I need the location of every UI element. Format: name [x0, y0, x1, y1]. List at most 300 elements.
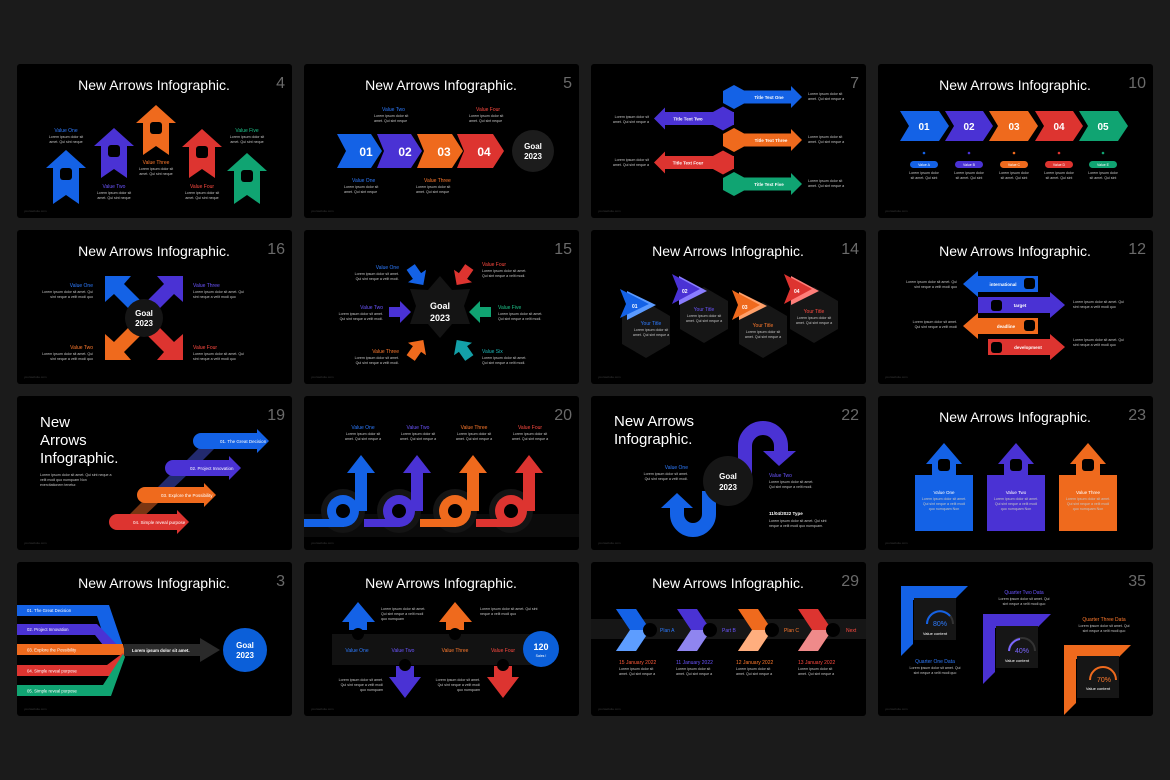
pills: 03. Explore the Possibility: [161, 493, 213, 498]
house orange: Qui sint neque a velit modi: [1067, 502, 1109, 506]
captions: amet. Qui sint neque a: [796, 321, 832, 325]
slide 35: quarter gauges: yourwebsite.com: [885, 707, 908, 711]
slide 22: S-curve arrows around goal: [591, 396, 866, 550]
labels: Value Three: [442, 648, 469, 654]
side texts: sint neque a velit modi quo: [1073, 343, 1116, 347]
arrow: orange: [136, 105, 176, 155]
slide number: 10: [1128, 75, 1146, 92]
labels: Value Four: [193, 345, 217, 351]
slide number: 14: [841, 241, 859, 258]
arrow 04: 04: [794, 289, 800, 295]
house purple: quo numquam Non: [1001, 507, 1031, 511]
title: New Arrows Infographic.: [652, 575, 804, 591]
arrow up orange: [439, 602, 472, 640]
band: [591, 619, 866, 639]
labels: Lorem ipsum dolor sit amet. Qui: [999, 597, 1050, 601]
dates: amet. Qui sint neque a: [619, 672, 655, 676]
labels: Lorem ipsum dolor sit amet.: [355, 356, 399, 360]
labels: Value One: [351, 425, 375, 431]
icons and labels: Plan A: [660, 628, 675, 634]
dates: 12 January 2022: [736, 660, 773, 666]
slide number: 23: [1128, 407, 1146, 424]
labels: sint neque a velit modi quo: [50, 295, 93, 299]
labels: Lorem ipsum dolor sit amet. Qui sint: [480, 607, 538, 611]
goal circle: Goal: [236, 641, 254, 650]
goal circle: 2023: [135, 319, 153, 328]
card orange: 70%: [1097, 677, 1111, 684]
icons and labels: Plan C: [784, 628, 799, 634]
slide number: 16: [267, 241, 285, 258]
pills: Value D: [1053, 163, 1066, 167]
slide 12: left/right alternating arrows: yourwebsite.com: [885, 375, 908, 379]
labels: Lorem ipsum dolor sit: [185, 191, 219, 195]
card purple: 40%: [1015, 648, 1029, 655]
slide number: 22: [841, 407, 859, 424]
card purple: Value content: [1005, 658, 1030, 663]
arrow 5 green right: [723, 172, 802, 196]
house orange: Value Three: [1076, 490, 1101, 495]
dates: Lorem ipsum dolor sit: [736, 667, 770, 671]
slide number: 3: [276, 573, 285, 590]
chevrons: [337, 134, 504, 168]
arrow 4 red left: [654, 150, 734, 174]
labels: quo numquam: [457, 688, 480, 692]
arrow 02: 02: [682, 289, 688, 295]
slide number: 35: [1128, 573, 1146, 590]
labels: Value Six: [482, 349, 503, 355]
captions: amet. Qui sint neque a: [633, 333, 669, 337]
labels: Value Two: [70, 345, 93, 351]
arrow down purple: [389, 659, 421, 698]
labels: [49, 128, 264, 200]
slide 3: converging bands to goal: [17, 562, 292, 716]
side texts: sint neque a velit modi quo: [1073, 305, 1116, 309]
side texts: Lorem ipsum dolor sit: [808, 179, 842, 183]
labels: Qui sint neque a velit modi.: [356, 277, 399, 281]
pills: Value A: [918, 163, 931, 167]
blue curved arrow: [661, 491, 709, 530]
pills: sit amet. Qui sint: [956, 176, 982, 180]
slide number: 4: [276, 75, 285, 92]
chevrons: 03: [437, 145, 451, 159]
pills: 02. Project Innovation: [190, 466, 234, 471]
pills: [109, 429, 269, 534]
labels: Lorem ipsum dolor sit: [457, 432, 491, 436]
goal circle: 2023: [719, 483, 737, 492]
labels: Lorem ipsum dolor sit amet.: [381, 607, 425, 611]
title block: Infographic.: [614, 431, 692, 448]
labels: neque a velit modi quo: [480, 612, 516, 616]
card blue: 80%: [933, 621, 947, 628]
labels: Lorem ipsum dolor sit: [469, 114, 503, 118]
labels: Value One: [54, 128, 78, 134]
labels: Value One: [70, 283, 93, 289]
arrow up blue: [342, 602, 375, 640]
arrow 3 orange right: [723, 128, 802, 152]
house purple: Qui sint neque a velit modi: [995, 502, 1037, 506]
side texts: amet. Qui sint neque a: [613, 163, 649, 167]
chevrons: 01: [918, 122, 930, 133]
pills: 01. The Great Decision: [220, 439, 267, 444]
labels: sint neque a velit modi quo: [1083, 629, 1125, 633]
slide number: 20: [554, 407, 572, 424]
slide 12: left/right alternating arrows: [878, 230, 1153, 384]
labels: Lorem ipsum dolor sit amet.: [482, 356, 526, 360]
slide 16: four diagonal arrows around goal: yourwebsite.com: [24, 375, 47, 379]
arrow target: [978, 292, 1065, 318]
labels: Lorem ipsum dolor sit amet. Qui sint: [769, 519, 827, 523]
side texts: amet. Qui sint neque a: [613, 120, 649, 124]
house orange: [1059, 443, 1117, 531]
side texts: amet. Qui sint neque a: [808, 184, 844, 188]
labels: Qui sint neque a velit modi: [341, 683, 383, 687]
dates: 13 January 2022: [798, 660, 835, 666]
arrow development: development: [1014, 345, 1042, 350]
captions: Your Title: [804, 309, 825, 315]
dark arrow: Lorem ipsum dolor sit amet.: [132, 648, 190, 653]
labels: quo numquam: [360, 688, 383, 692]
slide 4: five bookmark arrows: [17, 64, 292, 218]
title: New Arrows Infographic.: [939, 409, 1091, 425]
arrow 01: 01: [632, 304, 638, 310]
goal circle: [125, 299, 163, 337]
connectors: [123, 448, 215, 521]
labels: Qui sint neque a velit modi: [438, 683, 480, 687]
side texts: Lorem ipsum dolor sit amet. Qui: [1073, 300, 1124, 304]
labels: quo numquam: [381, 617, 404, 621]
house orange: quo numquam Non: [1073, 507, 1103, 511]
side texts: amet. Qui sint neque a: [808, 97, 844, 101]
slide 3: converging bands to goal: yourwebsite.com: [24, 707, 47, 711]
labels: Value Four: [491, 648, 515, 654]
labels: Value Two: [392, 648, 415, 654]
title block: New: [40, 414, 70, 431]
slide 23: three house arrows: yourwebsite.com: [885, 541, 908, 545]
side texts: Lorem ipsum dolor sit amet. Qui: [906, 280, 957, 284]
title block: Infographic.: [40, 450, 118, 467]
labels: Value Two: [769, 473, 792, 479]
pills: sit amet. Qui sint: [911, 176, 937, 180]
slide 10: five chevrons with pills: [878, 64, 1153, 218]
labels: Value Four: [482, 262, 506, 268]
labels: Qui sint neque a velit modi.: [769, 485, 812, 489]
house purple: [987, 443, 1045, 531]
labels: Value Four: [476, 107, 500, 113]
slide 7: hexagon arrows alternating: [591, 64, 866, 218]
title: New Arrows Infographic.: [78, 77, 230, 93]
labels: amet. Qui sint neque a: [456, 437, 492, 441]
slide 7: hexagon arrows alternating: yourwebsite.com: [598, 209, 621, 213]
pills: Value C: [1008, 163, 1021, 167]
chevrons: 02: [398, 145, 412, 159]
slide 14: arrows over hexagons: [591, 230, 866, 384]
side texts: [613, 92, 844, 188]
arrow 5 green right: Title Text Five: [754, 182, 784, 187]
chevrons: 03: [1008, 122, 1020, 133]
dark arrow: [124, 638, 220, 662]
arrow deadline: [963, 313, 1038, 339]
labels: Lorem ipsum dolor sit amet.: [339, 312, 383, 316]
captions: Lorem ipsum dolor sit: [687, 314, 721, 318]
title: New Arrows Infographic.: [939, 77, 1091, 93]
labels: sint neque a velit modi quo: [193, 357, 236, 361]
bands: 05. Simple reveal purpose: [27, 688, 78, 694]
bands: 02. Project Innovation: [27, 627, 69, 632]
pills: Value E: [1097, 163, 1110, 167]
labels: Lorem ipsum dolor sit amet. Qui: [910, 666, 961, 670]
side texts: Lorem ipsum dolor sit: [615, 158, 649, 162]
chevrons: [616, 609, 832, 651]
arrow 02: [672, 274, 707, 305]
slide 22: S-curve arrows around goal: yourwebsite.com: [598, 541, 621, 545]
arrows: [105, 276, 183, 360]
title: New Arrows Infographic.: [78, 575, 230, 591]
labels: sint neque a velit modi quo: [914, 671, 956, 675]
captions: Your Title: [641, 321, 662, 327]
icons and labels: [643, 623, 857, 637]
labels: Qui sint neque a velit modi: [381, 612, 424, 616]
chevrons: 01: [359, 145, 373, 159]
labels: Lorem ipsum dolor sit amet. Qui: [42, 290, 93, 294]
captions: Lorem ipsum dolor sit: [746, 330, 780, 334]
labels: Lorem ipsum dolor sit amet. Qui: [1079, 624, 1130, 628]
labels: Lorem ipsum dolor sit: [346, 432, 380, 436]
hexagons: [622, 287, 838, 358]
side texts: sint neque a velit modi quo: [914, 285, 957, 289]
labels: Value One: [352, 178, 375, 184]
labels: [339, 262, 542, 365]
pills: Lorem ipsum dolor: [1044, 171, 1075, 175]
labels: Lorem ipsum dolor sit: [416, 185, 450, 189]
chevrons: 04: [477, 145, 491, 159]
labels: Quarter Three Data: [1082, 617, 1126, 623]
slide number: 12: [1128, 241, 1146, 258]
labels: Lorem ipsum dolor sit: [374, 114, 408, 118]
captions: Lorem ipsum dolor sit: [634, 328, 668, 332]
house blue: Qui sint neque a velit modi: [923, 502, 965, 506]
labels: Value Three: [143, 160, 170, 166]
side texts: amet. Qui sint neque a: [808, 140, 844, 144]
labels: [344, 107, 503, 194]
labels: Lorem ipsum dolor sit: [230, 135, 264, 139]
title block: exercitationem tenetur.: [40, 483, 76, 487]
goal circle: 2023: [236, 651, 254, 660]
title block: New Arrows: [614, 413, 694, 430]
slide number: 19: [267, 407, 285, 424]
labels: Lorem ipsum dolor sit amet.: [498, 312, 542, 316]
arrow: blue: [46, 150, 86, 204]
labels: amet. Qui sint neque: [185, 196, 219, 200]
goal circle: [223, 628, 267, 672]
arrow 1 blue right: [723, 85, 802, 109]
labels: sint neque a velit modi quo: [50, 357, 93, 361]
title: New Arrows Infographic.: [365, 575, 517, 591]
labels: Lorem ipsum dolor sit amet.: [355, 272, 399, 276]
labels: Lorem ipsum dolor sit: [139, 167, 173, 171]
labels: [910, 590, 1130, 675]
labels: amet. Qui sint neque a: [345, 437, 381, 441]
labels: Lorem ipsum dolor sit: [513, 432, 547, 436]
goal star: Goal: [430, 301, 450, 311]
pills: sit amet. Qui sint: [1001, 176, 1027, 180]
labels: Quarter One Data: [915, 659, 955, 665]
labels: Value Two: [382, 107, 405, 113]
dates: amet. Qui sint neque a: [676, 672, 712, 676]
arrow development: [988, 334, 1065, 360]
labels: [644, 465, 827, 528]
arrow 4 red left: Title Text Four: [673, 160, 704, 166]
purple curved arrow: [745, 428, 796, 474]
dates: Lorem ipsum dolor sit: [676, 667, 710, 671]
pills: sit amet. Qui sint: [1090, 176, 1116, 180]
goal circle: Goal: [135, 309, 153, 318]
labels: Lorem ipsum dolor sit amet. Qui: [193, 352, 244, 356]
title: New Arrows Infographic.: [939, 243, 1091, 259]
side texts: Lorem ipsum dolor sit: [808, 135, 842, 139]
labels: amet. Qui sint neque: [416, 190, 449, 194]
house blue: Value One: [934, 490, 955, 495]
goal star: 2023: [430, 313, 450, 323]
spiral orange: [420, 455, 487, 533]
labels: Value Five: [235, 128, 259, 134]
labels: amet. Qui sint neque: [49, 140, 83, 144]
title block: velit modi quo numquam Non: [40, 478, 87, 482]
dark base band: [304, 514, 579, 537]
slide 23: three house arrows: [878, 396, 1153, 550]
pills: Lorem ipsum dolor: [1088, 171, 1119, 175]
120 sales circle: 120: [533, 642, 549, 652]
slide: up/down arrows with 120 sales: [304, 562, 579, 716]
arrow deadline: deadline: [997, 324, 1016, 329]
120 sales circle: Sales !: [536, 654, 546, 658]
arrows: [389, 261, 491, 364]
card purple: [983, 614, 1051, 684]
side texts: Lorem ipsum dolor sit amet.: [913, 320, 957, 324]
labels: Value Four: [518, 425, 542, 431]
slide 19: stair pills: [17, 396, 292, 550]
labels: Lorem ipsum dolor sit: [401, 432, 435, 436]
labels: Value Four: [190, 184, 214, 190]
120 sales circle: [523, 631, 559, 667]
goal star: [410, 276, 470, 338]
slide number: 7: [850, 75, 859, 92]
pills: 04. Simple reveal purpose: [133, 520, 186, 525]
band: [332, 634, 537, 665]
slide 15: six arrows pointing to goal star: [304, 230, 579, 384]
slide 20: spiral arrows: yourwebsite.com: [311, 541, 334, 545]
icons and labels: Part B: [722, 628, 737, 634]
labels: amet. Qui sint neque a: [512, 437, 548, 441]
labels: Value One: [345, 648, 369, 654]
captions: [633, 307, 832, 339]
captions: Your Title: [753, 323, 774, 329]
slide 4: five bookmark arrows: yourwebsite.com: [24, 209, 47, 213]
labels: Lorem ipsum dolor sit: [344, 185, 378, 189]
house blue: quo numquam Non: [929, 507, 959, 511]
arrow international: international: [989, 282, 1017, 287]
dates: 11 January 2022: [676, 660, 713, 666]
arrow: green: [227, 153, 267, 204]
dates: Lorem ipsum dolor sit: [619, 667, 653, 671]
labels: amet. Qui sint neque: [230, 140, 264, 144]
dates: [619, 660, 835, 676]
pills: [909, 152, 1119, 180]
labels: Lorem ipsum dolor sit amet. Qui: [42, 352, 93, 356]
bands: 01. The Great Decision: [27, 608, 72, 613]
pills: Value B: [963, 163, 976, 167]
arrow: purple: [94, 128, 134, 178]
slide 20: spiral arrows: [304, 396, 579, 550]
side texts: Lorem ipsum dolor sit amet. Qui: [1073, 338, 1124, 342]
house blue: Lorem ipsum dolor sit amet.: [922, 497, 966, 501]
labels: Value Three: [461, 425, 488, 431]
labels: amet. Qui sint neque: [139, 172, 173, 176]
labels: Qui sint neque a velit modi.: [356, 361, 399, 365]
labels: Qui sint neque a velit modi.: [482, 361, 525, 365]
card orange: Value content: [1086, 686, 1111, 691]
labels: [339, 607, 538, 692]
labels: neque a velit modi quo numquam.: [769, 524, 823, 528]
labels: Qui sint neque a velit modi.: [645, 477, 688, 481]
labels: Lorem ipsum dolor sit amet.: [644, 472, 688, 476]
captions: Lorem ipsum dolor sit: [797, 316, 831, 320]
slide 29: chevron timeline: yourwebsite.com: [598, 707, 621, 711]
slide 35: quarter gauges: [878, 562, 1153, 716]
slide number: 29: [841, 573, 859, 590]
title block: [614, 413, 694, 448]
chevrons: 02: [963, 122, 975, 133]
pills: Lorem ipsum dolor: [999, 171, 1030, 175]
spiral red: [476, 455, 543, 533]
labels: Value Two: [103, 184, 126, 190]
goal circle: Goal: [719, 472, 737, 481]
house blue: [915, 443, 973, 531]
arrow 01: [620, 289, 656, 320]
slide 10: five chevrons with pills: yourwebsite.com: [885, 209, 908, 213]
card orange: [1064, 645, 1131, 715]
arrow: red: [182, 129, 222, 178]
labels: [345, 425, 548, 441]
title block: [40, 414, 118, 487]
house purple: Lorem ipsum dolor sit amet.: [994, 497, 1038, 501]
chevrons: 05: [1097, 122, 1109, 133]
labels: Value Three: [424, 178, 451, 184]
slide 16: four diagonal arrows around goal: [17, 230, 292, 384]
labels: Qui sint neque a velit modi.: [498, 317, 541, 321]
captions: Your Title: [694, 307, 715, 313]
labels: Qui sint neque a velit modi.: [340, 317, 383, 321]
pills: sit amet. Qui sint: [1046, 176, 1072, 180]
bands: 04. Simple reveal purpose: [27, 668, 78, 674]
labels: amet. Qui sint neque: [374, 119, 407, 123]
goal circle: Goal: [524, 142, 542, 151]
labels: Lorem ipsum dolor sit: [97, 191, 131, 195]
captions: amet. Qui sint neque a: [686, 319, 722, 323]
slide: up/down arrows with 120 sales: yourwebsite.com: [311, 707, 334, 711]
labels: sint neque a velit modi quo: [193, 295, 236, 299]
labels: Value Two: [360, 305, 383, 311]
labels: Lorem ipsum dolor sit amet.: [769, 480, 813, 484]
chevrons: [900, 111, 1128, 141]
arrow 2 purple left: Title Text Two: [673, 116, 703, 122]
labels: Quarter Two Data: [1004, 590, 1044, 596]
title: New Arrows Infographic.: [365, 77, 517, 93]
arrow target: target: [1014, 303, 1027, 308]
labels: Lorem ipsum dolor sit amet.: [482, 269, 526, 273]
labels: sint neque a velit modi quo: [1003, 602, 1045, 606]
arrow 2 purple left: [654, 106, 734, 130]
side texts: [906, 280, 1124, 347]
